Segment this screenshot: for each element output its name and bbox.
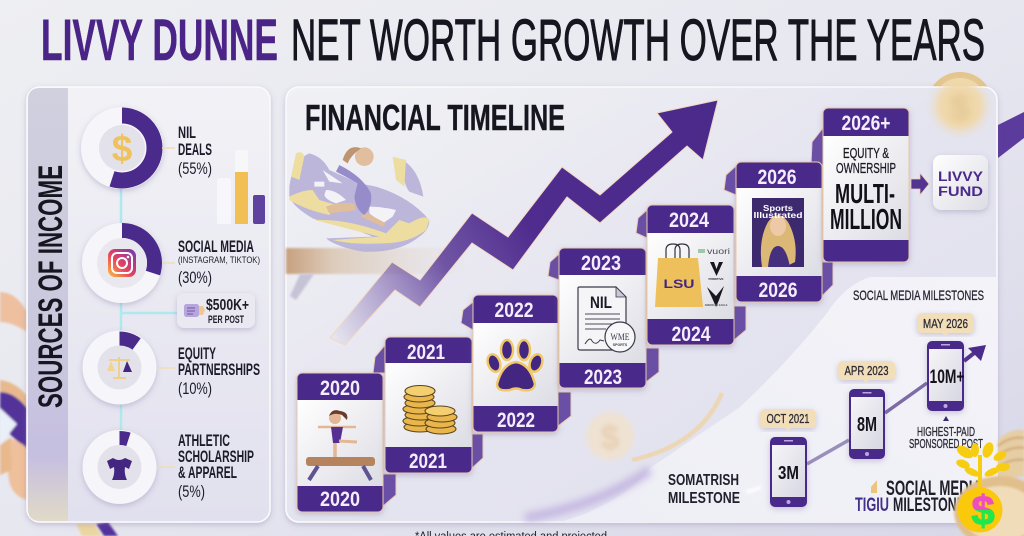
side heading: SOURCES OF INCOME [32, 165, 70, 408]
card: 2026 [736, 162, 822, 302]
card: 2026+ [823, 108, 909, 262]
icon: LSU shopping bag: LSU [664, 277, 694, 291]
card: 2020: 2020 [320, 488, 360, 511]
card: 2026+: MULTI- [835, 178, 895, 209]
faded gymnast and tiger [289, 147, 429, 252]
label: NIL deals: DEALS [178, 141, 212, 159]
panel: financial timeline [286, 81, 997, 522]
connectors [121, 188, 177, 431]
decoration: coin top right [927, 72, 993, 138]
callout: $500K+ per post [177, 293, 255, 328]
label: social media: SOCIAL MEDIA [178, 238, 254, 256]
blurred coin under glass [935, 81, 985, 131]
icon: gymnast on beam [306, 410, 375, 480]
label: athletic scholarship: ATHLETIC [178, 432, 230, 450]
badge: Livvy Fund [933, 155, 988, 210]
stair tabs [373, 128, 833, 506]
callout: $500K+ per post: $500K+ [206, 297, 249, 314]
card: 2023: 2023 [581, 252, 621, 275]
card: 2023 [559, 248, 646, 389]
donut: equity partnerships [82, 330, 156, 404]
donut: NIL deals [81, 107, 163, 189]
card: 2021: 2021 [407, 341, 445, 364]
label: equity partnerships: EQUITY [178, 345, 216, 363]
panel: sources of income [27, 87, 270, 522]
faded beam [286, 248, 476, 274]
milestone: May 2026: MAY 2026 [923, 316, 968, 331]
label: social media tigiu milestone [855, 477, 982, 516]
card: 2026+: EQUITY & [843, 146, 889, 162]
milestone: Oct 2021: 3M [778, 463, 799, 483]
label: athletic scholarship: SCHOLARSHIP [178, 448, 254, 466]
card: 2026: 2026 [758, 166, 796, 189]
faded coin: $ [601, 419, 620, 457]
card: 2026+: OWNERSHIP [836, 161, 896, 177]
label: athletic scholarship [178, 432, 254, 501]
icon: coin stacks [403, 386, 457, 434]
icon: paw print [485, 340, 545, 390]
faded curve [632, 393, 722, 460]
card: 2026: 2026 [758, 279, 798, 302]
label: social media: (INSTAGRAM, TIKTOK) [178, 255, 260, 266]
label: somatrish milestone: SOMATRISH [668, 472, 739, 489]
milestone: Apr 2023: 8M [857, 414, 877, 436]
milestone: Apr 2023 [838, 361, 895, 459]
decoration: coins bottom right [954, 430, 1024, 536]
blurred coin under glass: $ [950, 87, 970, 128]
card: 2021 [385, 337, 472, 473]
icon: LSU shopping bag [655, 244, 703, 307]
icon: NIL contract: NIL [590, 293, 612, 312]
donut: social media [82, 223, 162, 303]
card: 2024 [647, 205, 734, 346]
donut: athletic scholarship [82, 430, 156, 504]
card: 2024: 2024 [672, 323, 711, 346]
label: NIL deals [178, 124, 212, 178]
title: LIVVY DUNNE [41, 8, 278, 73]
note: highest-paid sponsored post: HIGHEST-PAID [917, 425, 975, 439]
milestone: Apr 2023: APR 2023 [844, 363, 888, 378]
growth line [807, 345, 986, 464]
label: athletic scholarship: & APPAREL [178, 464, 237, 482]
label: athletic scholarship: (5%) [178, 483, 205, 501]
label: NIL deals: NIL [178, 124, 196, 142]
heading: financial timeline: FINANCIAL TIMELINE [305, 97, 565, 138]
card: 2022: 2022 [497, 409, 535, 432]
bar chart [217, 150, 265, 224]
donut: NIL deals: $ [112, 128, 133, 169]
side band [28, 88, 68, 521]
label: equity partnerships: (10%) [178, 380, 212, 398]
decoration: left hand and ribbon [0, 292, 118, 536]
icon: Sports Illustrated cover: Sports [763, 203, 793, 213]
note: highest-paid sponsored post: SPONSORED POST [909, 437, 983, 451]
label: NIL deals: (55%) [178, 160, 212, 178]
label: somatrish milestone: MILESTONE [668, 490, 740, 507]
label: social media tigiu milestone: MILESTONE [893, 495, 965, 516]
brand logos: AMERICAN EAGLE [705, 304, 728, 307]
note: highest-paid sponsored post [909, 416, 983, 451]
label: equity partnerships [178, 345, 260, 398]
card: 2026+: 2026+ [842, 112, 890, 135]
growth arrow [330, 100, 718, 345]
milestone: May 2026: 10M+ [930, 367, 964, 388]
card: 2023: 2023 [584, 366, 622, 389]
card: 2020 [297, 373, 383, 512]
brand logos: PRIMITIVE [708, 277, 724, 281]
icon: Sports Illustrated cover: Illustrated [754, 211, 803, 220]
icon: Sports Illustrated cover [752, 198, 804, 267]
badge: Livvy Fund: LIVVY [938, 169, 983, 184]
milestone: Oct 2021 [760, 409, 816, 507]
arrow to fund [911, 173, 929, 195]
faded streak [745, 485, 762, 494]
decoration: right purple arrow [998, 112, 1024, 158]
label: somatrish milestone [668, 472, 740, 507]
icon: money plant coin: $ [971, 487, 995, 534]
light sheet lower right [560, 277, 997, 522]
icon: money plant coin [955, 441, 1010, 534]
brand logos: vuori [707, 247, 730, 256]
card: 2021: 2021 [409, 450, 447, 473]
card: 2020: 2020 [320, 377, 360, 400]
badge: Livvy Fund: FUND [938, 184, 983, 199]
brand logos [698, 247, 730, 307]
callout: $500K+ per post: PER POST [208, 314, 244, 326]
icon: NIL contract: WME [610, 332, 630, 342]
card: 2022 [473, 295, 558, 432]
icon: money plant coin: $ [971, 487, 995, 534]
milestone: May 2026 [917, 313, 974, 411]
icon: NIL contract: SPORTS [613, 343, 628, 347]
faded coin [586, 412, 634, 460]
card: 2022: 2022 [494, 299, 534, 322]
card: 2026+: MILLION [830, 204, 902, 236]
label: equity partnerships: PARTNERSHIPS [178, 361, 260, 379]
label: social media [178, 238, 260, 287]
icon: NIL contract [578, 287, 635, 352]
label: social media tigiu milestone: TIGIU [855, 495, 889, 516]
milestone: Oct 2021: OCT 2021 [766, 411, 810, 426]
label: social media: (30%) [178, 269, 212, 287]
card: 2024: 2024 [669, 209, 709, 232]
